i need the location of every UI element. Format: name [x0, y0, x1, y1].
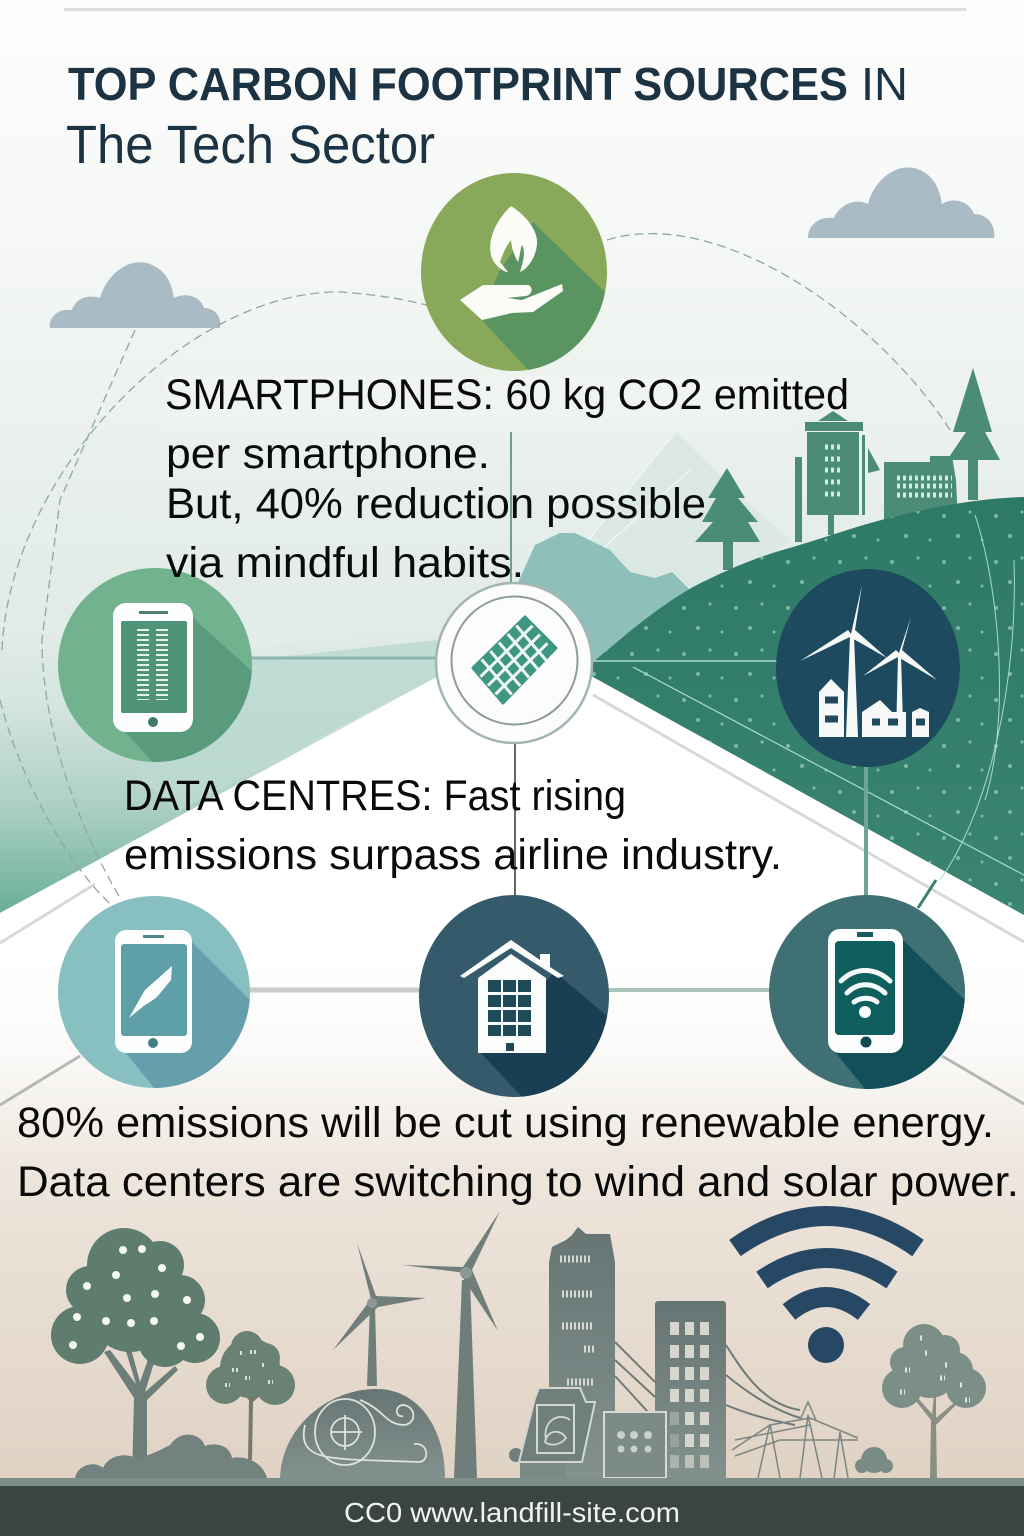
dome: [280, 1389, 445, 1478]
icon: phone with wifi: [769, 895, 965, 1089]
text block: renewable energy: 80% emissions will be cut using renewable energy.: [17, 1099, 994, 1147]
icon: leaf in hand: [421, 173, 607, 371]
device: [509, 1388, 595, 1480]
clouds: [50, 167, 994, 328]
mid tower: [655, 1301, 726, 1479]
text block: renewable energy: [17, 1099, 1019, 1206]
bushes: [75, 1435, 268, 1482]
bottom scene: [0, 1211, 1024, 1486]
icon: wifi: [735, 1216, 918, 1363]
title: The Tech Sector: [66, 115, 435, 175]
control box: [604, 1412, 666, 1478]
text block: smartphones: But, 40% reduction possible: [166, 480, 706, 528]
text block: data centres: [124, 772, 782, 879]
white road: [0, 677, 1024, 1200]
turbines: [333, 1211, 500, 1478]
ground: [0, 1478, 1024, 1486]
green hill: [593, 497, 1024, 915]
pylons: [732, 1402, 858, 1478]
footer bar: [0, 1486, 1024, 1536]
power cables: [615, 1342, 800, 1425]
town and trees on hill: [695, 368, 1000, 570]
shrub: [855, 1447, 893, 1473]
text block: smartphones: via mindful habits.: [166, 539, 524, 587]
title: TOP CARBON FOOTPRINT SOURCES: [68, 58, 848, 110]
right tree: [882, 1324, 986, 1478]
large tree: [51, 1228, 220, 1480]
icon: building: [415, 890, 615, 1100]
footer bar: CC0 www.landfill-site.com: [344, 1497, 680, 1528]
dashed arcs: [0, 234, 950, 908]
icon: smartphone: [58, 568, 252, 762]
mountains: [0, 432, 790, 913]
text block: smartphones: per smartphone.: [166, 430, 490, 478]
text block: data centres: emissions surpass airline industry.: [124, 831, 782, 879]
text block: smartphones: [165, 371, 849, 587]
text block: renewable energy: Data centers are switching to wind and solar power.: [17, 1158, 1019, 1206]
icon: phone with leaf: [58, 896, 250, 1088]
title: IN: [861, 58, 908, 110]
connector lines: [240, 432, 936, 990]
icon: wind turbines and town: [776, 569, 960, 767]
small tree left: [206, 1331, 295, 1460]
text block: smartphones: SMARTPHONES: 60 kg CO2 emitted: [165, 371, 849, 419]
title: [66, 58, 908, 175]
text block: data centres: DATA CENTRES: Fast rising: [124, 772, 626, 820]
tall tower: [549, 1227, 615, 1478]
icon: solar panel: [436, 583, 592, 743]
